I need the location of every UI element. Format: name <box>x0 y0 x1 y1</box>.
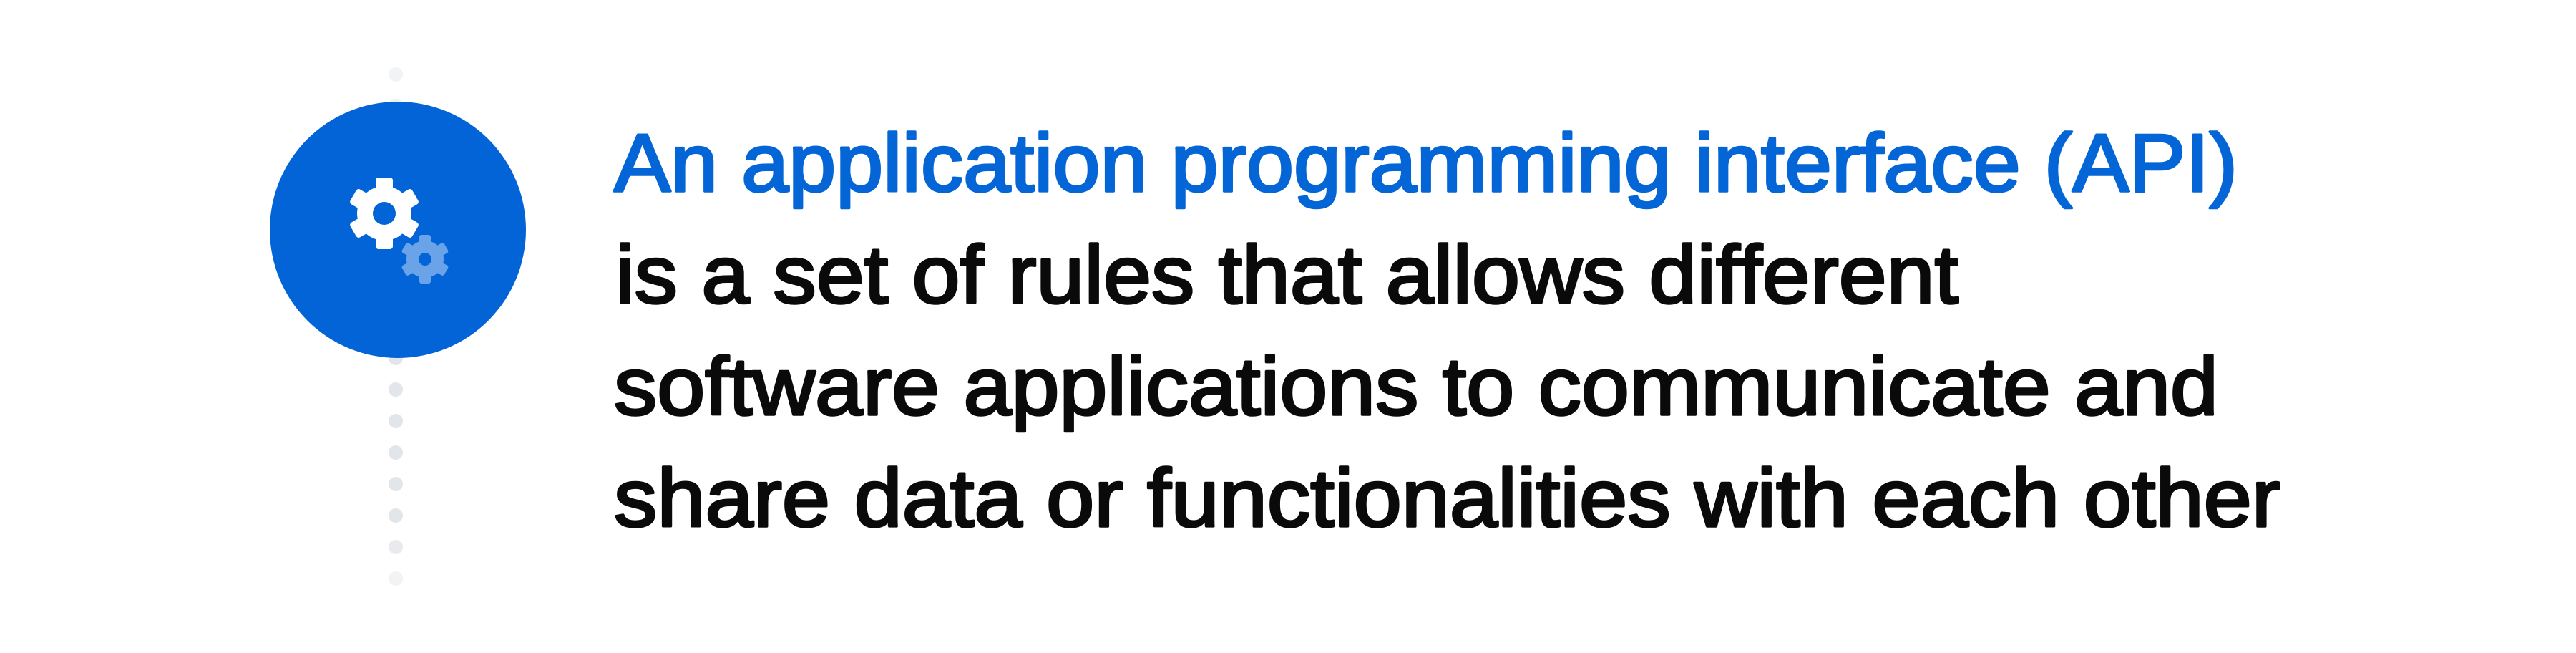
body line 2: is a set of rules that allows different <box>615 230 1958 321</box>
text block: API definition <box>614 118 2280 544</box>
heading: An application programming interface (API): An application programming interface (API) <box>614 118 2238 209</box>
body line 3: software applications to communicate and <box>614 342 2218 432</box>
icon: gears circle <box>270 102 526 358</box>
icon: small gear <box>401 235 449 284</box>
body line 4: share data or functionalities with each other <box>614 453 2280 544</box>
icon: large gear <box>349 178 419 249</box>
